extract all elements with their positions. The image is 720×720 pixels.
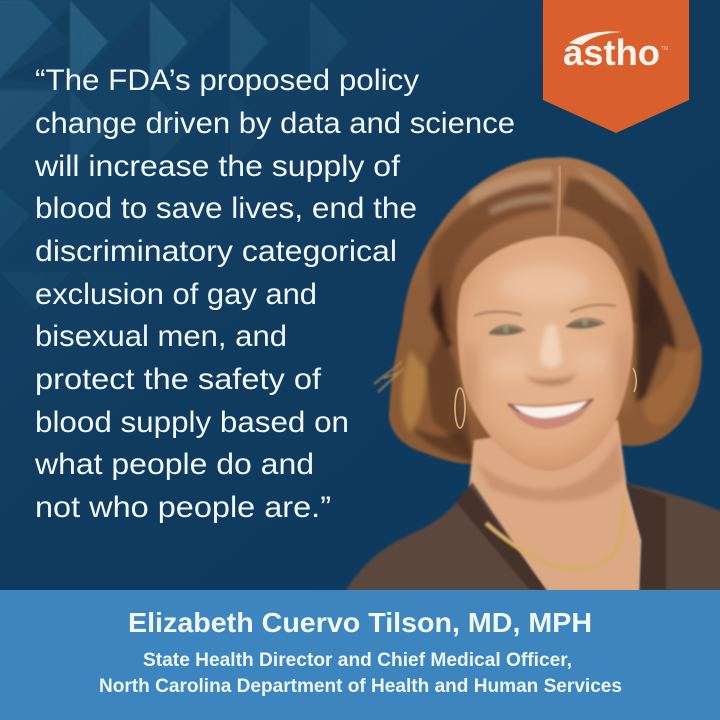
- quote text: bisexual men, and: [35, 320, 287, 353]
- nose: [525, 325, 577, 386]
- speaker title line 2: North Carolina Department of Health and Human Services: [99, 676, 622, 697]
- quote text: “The FDA’s proposed policy: [35, 64, 419, 97]
- quote text: blood supply based on: [35, 406, 349, 439]
- speaker title line 1: State Health Director and Chief Medical Officer,: [143, 650, 572, 671]
- quote text: change driven by data and science: [35, 107, 515, 140]
- geometric triangle pattern: [0, 0, 346, 246]
- neck and chest: [469, 420, 642, 592]
- quote text: protect the safety of: [35, 363, 322, 396]
- hair: [374, 157, 702, 464]
- quote text: not who people are.”: [35, 491, 331, 524]
- earrings: [455, 368, 636, 428]
- face: [457, 236, 633, 471]
- astho logo: TM: [661, 46, 668, 52]
- eyes and brows: [474, 305, 616, 335]
- quote text: what people do and: [34, 448, 314, 481]
- portrait photo illustration: [345, 157, 720, 592]
- quote text: discriminatory categorical: [35, 235, 397, 268]
- name band: [0, 590, 720, 720]
- face shading: [463, 265, 628, 418]
- speaker name: Elizabeth Cuervo Tilson, MD, MPH: [128, 607, 592, 638]
- quote text: blood to save lives, end the: [35, 192, 417, 225]
- hair shading: [402, 168, 698, 462]
- necklace: [486, 495, 624, 569]
- sweater: [345, 482, 720, 592]
- quote text: exclusion of gay and: [35, 278, 317, 311]
- smile: [508, 399, 593, 429]
- quote text: will increase the supply of: [34, 150, 401, 183]
- quote text: [34, 64, 515, 524]
- hair parting: [557, 166, 560, 236]
- astho logo: astho: [563, 32, 660, 73]
- orange banner: [543, 0, 689, 133]
